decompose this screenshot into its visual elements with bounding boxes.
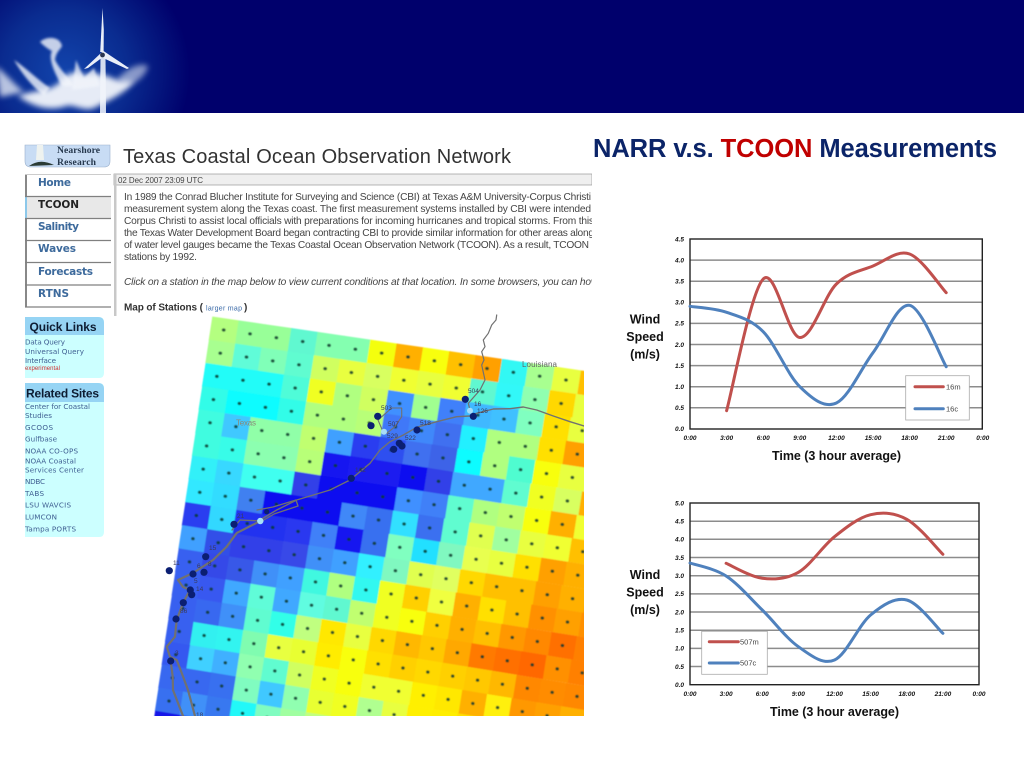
y axis labels: 0.0 (675, 426, 684, 433)
x axis labels (683, 691, 986, 698)
x axis labels: 9:00 (793, 435, 807, 442)
series 16c (690, 305, 946, 405)
y axis labels: 5.0 (675, 500, 684, 507)
sidebar: related sites: NOAA CO-OPS (25, 447, 78, 456)
legend: 507c (740, 659, 757, 668)
plot grid (690, 239, 982, 429)
legend: 507m (740, 637, 759, 646)
station labels: 16 (474, 401, 482, 408)
x axis labels (683, 435, 990, 442)
y axis title: Speed (626, 586, 664, 600)
header banner (0, 0, 1024, 113)
series 16m (727, 253, 946, 411)
sidebar: related sites: NOAA Coastal (25, 456, 76, 465)
sidebar: related sites: TABS (24, 489, 44, 498)
y axis title (626, 312, 664, 361)
intro paragraph: stations by 1992. (124, 252, 197, 263)
y axis labels: 4.0 (674, 537, 684, 544)
tide stations (166, 396, 477, 665)
map instructions: Click on a station in the map below to view current conditions at that location. In some browsers, you can hov (124, 277, 597, 288)
y axis labels: 3.5 (675, 278, 684, 286)
x axis labels: 6:00 (756, 691, 769, 698)
x axis labels: 21:00 (937, 435, 955, 442)
x axis labels: 15:00 (865, 435, 882, 442)
slide title: NARR v.s. TCOON Measurements (593, 135, 997, 163)
x axis labels: 3:00 (720, 435, 733, 442)
website screenshot: TCOON page: larger map (206, 306, 242, 312)
sidebar: related sites: Related Sites (26, 386, 99, 400)
station labels: 126 (477, 408, 488, 415)
station labels: 529 (387, 433, 398, 440)
y axis labels (674, 500, 684, 689)
sidebar: quick links: Interface (25, 356, 57, 365)
intro paragraph (124, 192, 594, 263)
logo: Nearshore Research: Research (57, 157, 97, 168)
x axis title: Time (3 hour average) (770, 705, 899, 719)
sidebar: quick links: experimental (25, 366, 60, 372)
y axis labels: 2.0 (674, 609, 684, 616)
sidebar: related sites: Gulfbase (25, 435, 58, 444)
sidebar: related sites: GCOOS (25, 423, 53, 432)
x axis labels: 6:00 (757, 435, 770, 442)
navigation menu: Waves (38, 243, 76, 255)
chart: station 507 wind speed (626, 500, 986, 719)
station labels: 18 (196, 712, 204, 719)
logo: Nearshore Research (25, 145, 110, 168)
y axis title: Wind (630, 312, 660, 326)
y axis labels (674, 236, 684, 433)
x axis labels: 21:00 (934, 691, 952, 698)
x axis labels: 9:00 (792, 691, 805, 698)
station labels: 8 (208, 561, 212, 568)
sidebar: related sites: Services Center (25, 465, 84, 474)
legend: 16m (946, 382, 961, 391)
plot grid (690, 503, 979, 685)
x axis labels: 0:00 (683, 435, 697, 442)
sidebar: related sites (24, 383, 104, 537)
y axis labels: 3.5 (675, 555, 684, 562)
station labels: 503 (381, 405, 392, 412)
y axis labels: 0.5 (675, 405, 684, 412)
sidebar: related sites: LUMCON (25, 513, 57, 522)
y axis title: (m/s) (630, 347, 660, 361)
navigation menu: TCOON (38, 199, 79, 211)
y axis labels: 1.5 (675, 363, 684, 370)
y axis labels: 1.0 (675, 384, 684, 391)
sidebar: related sites: Studies (25, 411, 52, 420)
station labels: 3 (175, 650, 179, 657)
intro paragraph: Corpus Christi to assist local officials with preparations for incoming hurricanes and tropical storms. From this (124, 216, 594, 227)
legend: 16c (946, 404, 958, 413)
y axis labels: 0.5 (675, 664, 684, 671)
y axis labels: 4.0 (674, 257, 684, 264)
y axis labels: 2.0 (674, 342, 684, 349)
intro paragraph: of water level gauges became the Texas Coastal Ocean Observation Network (TCOON). As a result, TCOON (124, 240, 589, 251)
page heading: Texas Coastal Ocean Observation Network (123, 146, 512, 168)
navigation menu (25, 174, 111, 307)
legend (702, 631, 767, 674)
station labels: 504 (468, 388, 479, 395)
y axis labels: 4.5 (674, 236, 684, 243)
x axis labels: 0:00 (972, 691, 986, 698)
station labels: 86 (180, 608, 188, 615)
x axis labels: 18:00 (901, 435, 918, 442)
x axis labels: 12:00 (826, 691, 843, 698)
website screenshot: TCOON page (25, 145, 597, 316)
x axis labels: 0:00 (976, 435, 990, 442)
series 507m (726, 513, 943, 579)
website screenshot: TCOON page: ) (244, 302, 247, 314)
y axis labels: 3.0 (675, 573, 684, 580)
y axis labels: 4.5 (674, 518, 684, 526)
x axis title: Time (3 hour average) (772, 449, 901, 463)
x axis labels: 3:00 (720, 691, 733, 698)
legend (906, 376, 969, 420)
y axis title: (m/s) (630, 603, 660, 617)
logo: Nearshore Research: Nearshore (57, 145, 101, 156)
station labels: 15 (209, 545, 217, 552)
station labels: 522 (405, 435, 416, 442)
y axis labels: 3.0 (675, 300, 684, 307)
station labels: 21 (237, 513, 245, 520)
series 507c (690, 563, 943, 661)
wind speed map (154, 314, 584, 716)
x axis labels: 15:00 (862, 691, 879, 698)
navigation menu: Forecasts (38, 266, 93, 278)
x axis labels: 0:00 (683, 691, 697, 698)
heatmap grid (154, 316, 584, 716)
map of stations heading: Map of Stations ( (124, 302, 204, 314)
coastline and river (167, 315, 584, 716)
station labels: 14 (196, 586, 204, 593)
y axis labels: 1.5 (675, 628, 684, 634)
date bar (114, 174, 592, 316)
y axis title: Wind (630, 568, 660, 582)
sidebar: related sites: Tampa PORTS (24, 525, 76, 534)
sidebar: related sites: LSU WAVCIS (25, 501, 71, 510)
x axis labels: 18:00 (898, 691, 915, 698)
intro paragraph: measurement system along the Texas coast. The first measurement systems installed by CBI were intended (124, 204, 591, 215)
sidebar: quick links: Quick Links (30, 320, 97, 334)
y axis labels: 1.0 (675, 646, 684, 653)
navigation menu: Home (38, 177, 71, 189)
date bar: 02 Dec 2007 23:09 UTC (118, 176, 203, 185)
label: Louisiana: Louisiana (522, 360, 558, 369)
y axis title: Speed (626, 330, 664, 344)
station labels: 5 (194, 578, 198, 585)
x axis labels: 12:00 (828, 435, 845, 442)
navigation menu: Salinity (38, 221, 79, 233)
sidebar: quick links: Data Query (25, 338, 66, 346)
sidebar: related sites: NDBC (25, 477, 45, 486)
y axis labels: 2.5 (674, 321, 684, 328)
intro paragraph: the Texas Water Development Board began contracting CBI to provide similar information for other areas along (124, 228, 594, 239)
wind turbine (84, 8, 129, 113)
station labels: 142 (355, 467, 366, 474)
chart: station 16 wind speed (626, 236, 990, 463)
sidebar: related sites: Center for Coastal (25, 402, 90, 411)
y axis labels: 0.0 (675, 682, 684, 689)
y axis title (626, 568, 664, 617)
cloud (0, 38, 148, 109)
sidebar: quick links (25, 317, 104, 378)
station labels (173, 388, 488, 719)
station labels: 518 (420, 420, 431, 427)
station labels: 6 (197, 563, 201, 570)
y axis labels: 2.5 (674, 591, 684, 598)
sidebar: quick links: Universal Query (25, 347, 85, 356)
station labels: 507 (388, 421, 399, 428)
label: Texas: Texas (236, 418, 256, 428)
navigation menu: RTNS (38, 288, 69, 300)
intro paragraph: In 1989 the Conrad Blucher Institute for Surveying and Science (CBI) at Texas A&M University-Corpus Christi (124, 192, 591, 203)
station labels: 11 (173, 560, 180, 567)
